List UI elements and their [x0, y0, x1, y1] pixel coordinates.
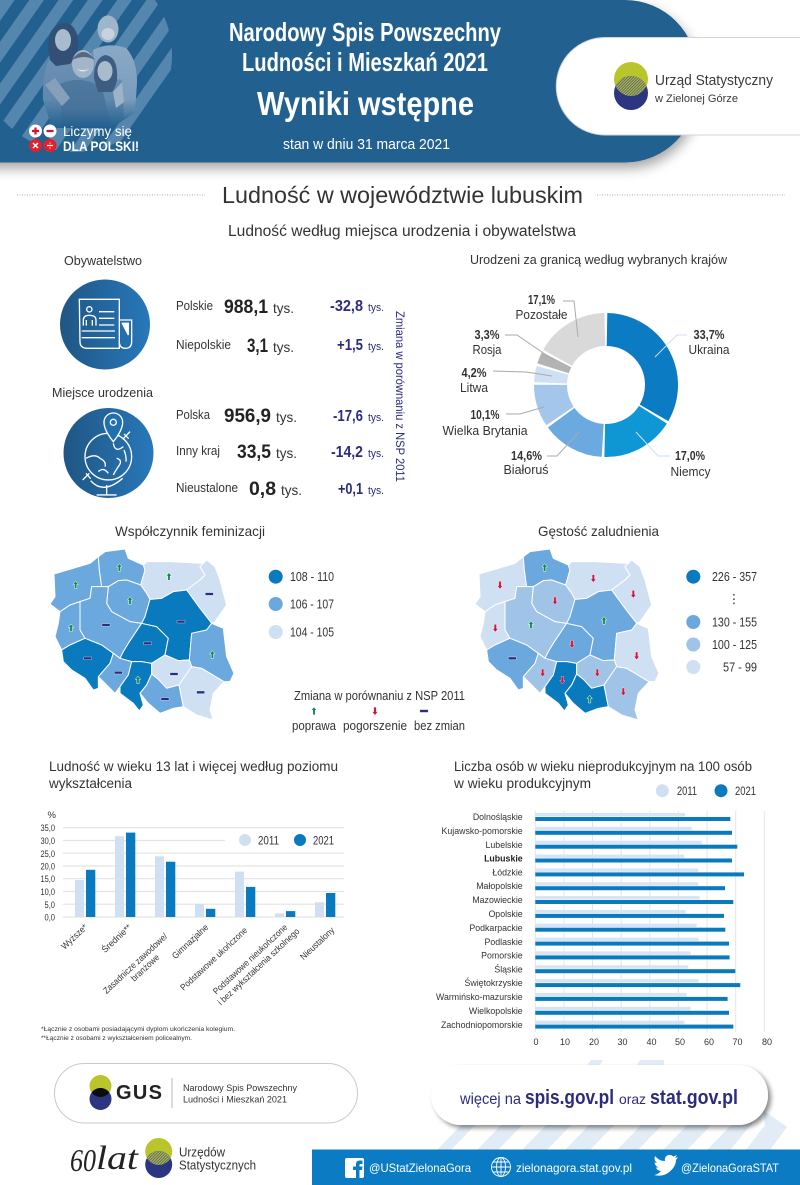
section subtitle: Ludność według miejsca urodzenia i obywatelstwa — [228, 223, 576, 240]
legend: change since 2011 — [292, 689, 465, 733]
GUS logo mark — [90, 1075, 112, 1110]
offices caption: Statystycznych — [179, 1158, 256, 1172]
map: density — [475, 549, 659, 720]
family photo — [43, 16, 137, 128]
region labels: Świętokrzyskie — [465, 977, 523, 988]
region labels: Śląskie — [494, 964, 523, 974]
link pill: oraz — [619, 1091, 646, 1107]
footnotes — [41, 1026, 235, 1042]
icon: globe — [64, 408, 154, 498]
values: Niepolskie: 3,1 — [247, 335, 268, 357]
legend: dependency ratio: 2011 — [677, 786, 697, 798]
donut labels: Białoruś — [504, 462, 549, 477]
values: Inny kraj: -14,2 — [331, 444, 363, 461]
header banner — [0, 0, 697, 162]
region labels: Kujawsko-pomorskie — [442, 826, 523, 836]
category labels: branżowe — [129, 952, 161, 983]
legend: dependency ratio — [656, 784, 756, 798]
heading: education — [48, 759, 338, 791]
legend: change since 2011: poprawa — [292, 719, 336, 733]
category labels — [59, 921, 337, 1007]
values: Polska: -17,6 — [333, 408, 363, 425]
values: Nieustalone: 0,8 — [249, 478, 276, 500]
heading: density: Gęstość zaludnienia — [538, 523, 659, 539]
donut labels: 4,2% — [462, 366, 486, 380]
chart axis: 35,0 — [40, 823, 55, 834]
values: Polskie: -32,8 — [330, 298, 363, 315]
legend: feminization: 108 - 110 — [290, 570, 334, 584]
heading: feminization: Współczynnik feminizacji — [115, 523, 265, 539]
legend: feminization — [269, 570, 334, 640]
offices logo mark — [145, 1138, 172, 1178]
contact bar: @ZielonaGoraSTAT — [681, 1161, 780, 1175]
icon: twitter — [654, 1155, 678, 1176]
header title: stan w dniu 31 marca 2021 — [283, 136, 450, 153]
heading: education: Ludność w wieku 13 lat i więcej według poziomu — [49, 759, 338, 774]
GUS caption: Ludności i Mieszkań 2021 — [183, 1094, 287, 1106]
region labels — [436, 812, 523, 1030]
donut labels: Ukraina — [688, 342, 730, 357]
category labels: i bez wykształcenia szkolnego — [216, 926, 301, 1007]
category labels: Podstawowe ukończone — [178, 925, 249, 992]
values: Niepolskie — [176, 335, 384, 357]
donut labels: 33,7% — [694, 328, 724, 342]
legend: density: 130 - 155 — [712, 616, 757, 630]
category labels: Zasadnicze zawodowe/ — [101, 931, 170, 996]
office logo pill — [556, 38, 800, 135]
value axis: 80 — [762, 1037, 772, 1047]
header title — [229, 17, 501, 153]
values: Inny kraj: Inny kraj — [176, 443, 220, 458]
values: Polskie — [176, 296, 384, 318]
values: Nieustalone: tys. — [281, 482, 302, 498]
donut labels: 14,6% — [511, 449, 542, 463]
donut labels: 10,1% — [470, 408, 500, 422]
heading: place of birth: Miejsce urodzenia — [52, 385, 154, 400]
donut labels: Niemcy — [670, 464, 711, 479]
office logo mark — [614, 62, 648, 110]
chart axis: 0,0 — [44, 912, 55, 924]
values: Nieustalone — [176, 478, 384, 500]
values: Polskie: tys. — [273, 300, 294, 316]
office name — [654, 72, 773, 105]
values: Polskie: 988,1 — [224, 296, 268, 318]
contact bar — [312, 1150, 800, 1185]
legend: density — [686, 570, 757, 674]
region labels: Wielkopolskie — [469, 1006, 523, 1016]
region labels: Małopolskie — [476, 881, 523, 891]
header stripes — [0, 0, 175, 160]
legend: change since 2011: Zmiana w porównaniu z NSP 2011 — [294, 689, 465, 703]
footnotes: *Łącznie z osobami posiadającymi dyplom ukończenia kolegium. — [41, 1026, 235, 1033]
region labels: Podkarpackie — [469, 923, 523, 933]
campaign slogan: Liczymy się — [63, 123, 132, 139]
value axis: 30 — [617, 1037, 628, 1047]
region labels: Dolnośląskie — [473, 812, 523, 822]
chart legend — [239, 834, 334, 848]
donut labels: Wielka Brytania — [442, 423, 528, 438]
donut labels: Pozostałe — [516, 307, 568, 322]
chart axis: 15,0 — [40, 874, 55, 885]
legend: density: 100 - 125 — [712, 638, 757, 652]
donut labels: Rosja — [472, 342, 502, 357]
values: Polska: Polska — [176, 407, 211, 422]
GUS wordmark: GUS — [116, 1082, 162, 1104]
legend: dependency ratio: 2021 — [735, 786, 756, 798]
values: Polska — [176, 405, 384, 427]
campaign slogan — [63, 123, 139, 154]
chart legend: 2011 — [258, 834, 279, 848]
values: Nieustalone: +0,1 — [338, 481, 363, 498]
values: Niepolskie: +1,5 — [337, 337, 363, 354]
value axis: 20 — [589, 1037, 599, 1047]
panel: place of birth — [52, 385, 384, 500]
campaign icons — [29, 124, 56, 152]
legend: feminization: 104 - 105 — [290, 626, 334, 640]
heading: education: wykształcenia — [48, 776, 132, 791]
header title: Wyniki wstępne — [257, 85, 474, 122]
values: Polska: tys. — [276, 409, 297, 425]
region labels: Zachodniopomorskie — [441, 1020, 523, 1030]
chart axis: 25,0 — [40, 849, 55, 860]
region labels: Pomorskie — [481, 950, 523, 960]
chart axis: 20,0 — [40, 862, 55, 872]
values: Polska: tys. — [368, 412, 384, 424]
heading: dependency ratio: w wieku produkcyjnym — [453, 776, 591, 791]
donut leader lines — [493, 301, 687, 456]
values: Nieustalone: Nieustalone — [176, 480, 238, 495]
bars 2021 — [535, 817, 744, 1029]
value axis: 10 — [560, 1037, 570, 1047]
values: Inny kraj: tys. — [276, 445, 297, 461]
region labels: Łódzkie — [492, 868, 523, 878]
region labels: Podlaskie — [485, 937, 523, 947]
value axis: 60 — [704, 1037, 714, 1047]
values: Niepolskie: Niepolskie — [176, 337, 231, 352]
value axis: 50 — [675, 1037, 685, 1047]
legend: density: 57 - 99 — [723, 660, 757, 674]
region labels: Lubuskie — [484, 854, 523, 864]
bars 2021 — [86, 833, 335, 917]
bars 2011 — [535, 813, 702, 1024]
GUS logo pill — [54, 1064, 358, 1123]
60 years logo: 60 — [70, 1142, 96, 1178]
donut labels: 17,0% — [675, 449, 705, 463]
link pill: więcej na — [459, 1091, 521, 1108]
header title: Ludności i Mieszkań 2021 — [242, 47, 488, 77]
map arrows: feminization — [68, 564, 215, 700]
value axis: 40 — [646, 1037, 657, 1047]
chart axis: 10,0 — [40, 887, 55, 898]
contact bar: @UStatZielonaGora — [369, 1161, 471, 1175]
link pill — [431, 1065, 768, 1125]
background stripes — [437, 1060, 787, 1150]
contact bar: zielonagora.stat.gov.pl — [516, 1161, 632, 1175]
main title: Ludność w województwie lubuskim — [222, 182, 583, 208]
region labels: Warmińsko-mazurskie — [436, 992, 523, 1002]
legend: feminization: 106 - 107 — [290, 598, 334, 612]
values: Nieustalone: tys. — [368, 485, 384, 497]
icon: globe — [492, 1158, 510, 1176]
chart legend: 2021 — [313, 834, 334, 848]
legend: density: ⋮ — [728, 592, 740, 606]
legend: change since 2011: bez zmian — [414, 719, 465, 733]
chart axis — [40, 810, 57, 924]
value axis: 0 — [533, 1037, 539, 1047]
values: Inny kraj — [176, 441, 384, 463]
region labels: Mazowieckie — [472, 895, 523, 905]
values: Polska: 956,9 — [224, 405, 271, 427]
bar chart: dependency ratio — [436, 811, 772, 1047]
chart axis: % — [48, 810, 57, 821]
header title: Narodowy Spis Powszechny — [229, 17, 501, 47]
values: Inny kraj: 33,5 — [237, 441, 271, 463]
link pill: stat.gov.pl — [650, 1087, 738, 1109]
values: Polskie: tys. — [368, 302, 384, 314]
region labels: Opolskie — [488, 909, 523, 919]
office name: Urząd Statystyczny — [655, 72, 773, 89]
panel: citizenship — [60, 253, 384, 370]
values: Inny kraj: tys. — [368, 448, 384, 460]
icon: facebook — [345, 1158, 364, 1178]
donut labels: 3,3% — [474, 328, 500, 342]
value axis: 70 — [732, 1037, 743, 1047]
vertical caption: Zmiana w porównaniu z NSP 2011 — [393, 311, 407, 482]
map: feminization — [50, 549, 234, 720]
icon: document — [60, 280, 150, 370]
GUS caption: Narodowy Spis Powszechny — [183, 1083, 297, 1094]
donut labels: 17,1% — [528, 293, 555, 307]
value axis — [533, 1037, 772, 1047]
donut chart — [442, 293, 730, 479]
donut labels: Litwa — [460, 380, 489, 395]
values: Niepolskie: tys. — [273, 339, 294, 355]
chart axis: 5,0 — [44, 900, 55, 911]
values: Polskie: Polskie — [176, 298, 213, 313]
heading: dependency ratio — [453, 759, 752, 791]
heading: dependency ratio: Liczba osób w wieku nieprodukcyjnym na 100 osób — [454, 759, 752, 774]
legend: density: 226 - 357 — [712, 570, 757, 584]
category labels: Gimnazjalne — [170, 922, 210, 961]
office name: w Zielonej Górze — [654, 93, 738, 105]
legend: change since 2011: pogorszenie — [343, 719, 407, 733]
bars 2011 — [75, 836, 324, 917]
bar chart: education — [40, 810, 344, 1007]
offices caption: Urzędów — [179, 1145, 226, 1160]
footnotes: **Łącznie z osobami z wykształceniem policealnym. — [41, 1035, 192, 1042]
60 years logo — [70, 1138, 256, 1178]
map arrows: density — [493, 564, 639, 703]
region labels: Lubelskie — [486, 840, 523, 850]
category labels: Podstawowe nieukończone — [211, 922, 289, 996]
campaign slogan: DLA POLSKI! — [63, 138, 139, 154]
donut labels — [442, 293, 730, 479]
heading: citizenship: Obywatelstwo — [64, 253, 142, 268]
category labels: Nieustalony — [298, 925, 337, 962]
values: Niepolskie: tys. — [368, 341, 384, 353]
60 years logo: lat — [96, 1140, 140, 1177]
heading: born abroad: Urodzeni za granicą według wybranych krajów — [470, 252, 728, 267]
offices caption — [179, 1145, 256, 1172]
link pill: spis.gov.pl — [525, 1087, 614, 1109]
category labels: Średnie** — [99, 921, 134, 955]
chart axis: 30,0 — [40, 836, 55, 847]
category labels: Wyższe* — [59, 922, 90, 951]
GUS caption — [183, 1083, 297, 1106]
